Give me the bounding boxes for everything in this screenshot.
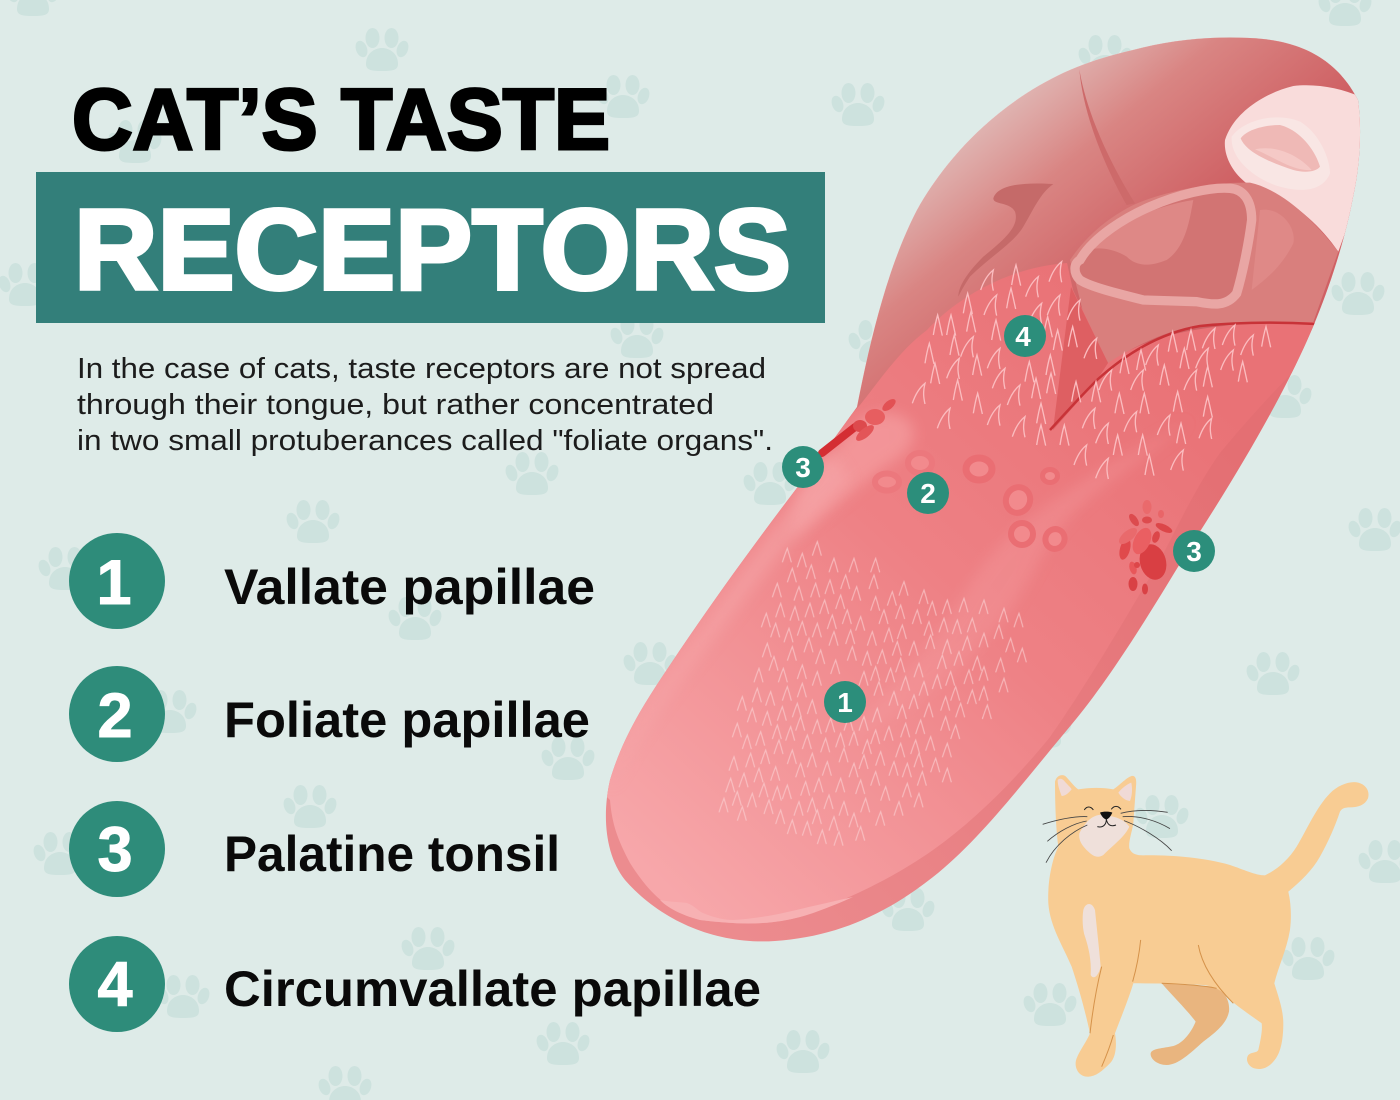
cat body [1048,775,1369,1077]
legend item 4: Circumvallate papillae [224,961,761,1017]
title banner: RECEPTORS: RECEPTORS [74,187,791,314]
marker 3 left [782,446,824,488]
legend item 2: 2 [97,681,133,751]
marker 1 [824,681,866,723]
legend item 3: Palatine tonsil [224,826,560,882]
legend item 2: Foliate papillae [224,692,590,748]
intro paragraph: through their tongue, but rather concentrated [77,389,714,421]
groove on tongue back [1079,70,1130,200]
intro paragraph: in two small protuberances called "foliate organs". [77,425,773,457]
lighter surface streak [937,461,1128,662]
marker 3 right [1173,530,1215,572]
leg patch [1083,904,1101,977]
pale inner ring [1232,117,1330,190]
front tongue surface [590,263,1345,923]
wedge shadow [1053,287,1108,430]
throat ring [1075,188,1252,304]
legend item 4: 4 [97,950,133,1020]
pale epiglottis area [1225,85,1370,252]
pale inner opening [1241,125,1320,172]
marker 1: 1 [837,687,853,718]
legend item 3 [69,801,560,897]
marker 4: 4 [1015,321,1031,352]
cat illustration [1043,775,1369,1077]
cat face [1043,806,1172,863]
ears [1058,779,1072,796]
throat ring inner [1080,193,1247,299]
marker 2 [907,472,949,514]
legend item 1: Vallate papillae [224,559,595,615]
fur lines [1090,940,1233,1067]
chest patch [1079,815,1129,857]
intro paragraph [77,353,773,457]
left tonsil [822,397,898,453]
legend item 1 [69,533,595,629]
marker 2: 2 [920,478,936,509]
legend item 4 [69,936,761,1032]
back-of-tongue details [958,69,1370,363]
marker 3 right: 3 [1186,536,1202,567]
dark fold [958,183,1053,297]
marker 3 left: 3 [795,452,811,483]
throat block [1070,183,1338,363]
marker 4 [1004,315,1046,357]
far hind leg [1151,983,1229,1065]
tongue underside [590,30,1380,960]
red fold line [1050,323,1316,430]
left edge highlight [701,460,840,642]
tongue illustration [590,20,1380,960]
title: CAT'S TASTE: CAT’S TASTE [72,72,610,168]
legend item 3: 3 [97,815,133,885]
legend item 2 [69,666,590,762]
taste hairs: back of tongue [912,262,1271,479]
legend item 1: 1 [96,548,132,618]
taste hairs: tongue tip [719,542,1026,846]
legend list [69,533,761,1032]
tip highlight [660,897,853,923]
tongue back [849,38,1360,418]
intro paragraph: In the case of cats, taste receptors are not spread [77,353,766,385]
foliate papillae ovals [875,453,1068,552]
pale area near left tonsil [802,411,915,526]
right tonsil [1116,500,1174,594]
